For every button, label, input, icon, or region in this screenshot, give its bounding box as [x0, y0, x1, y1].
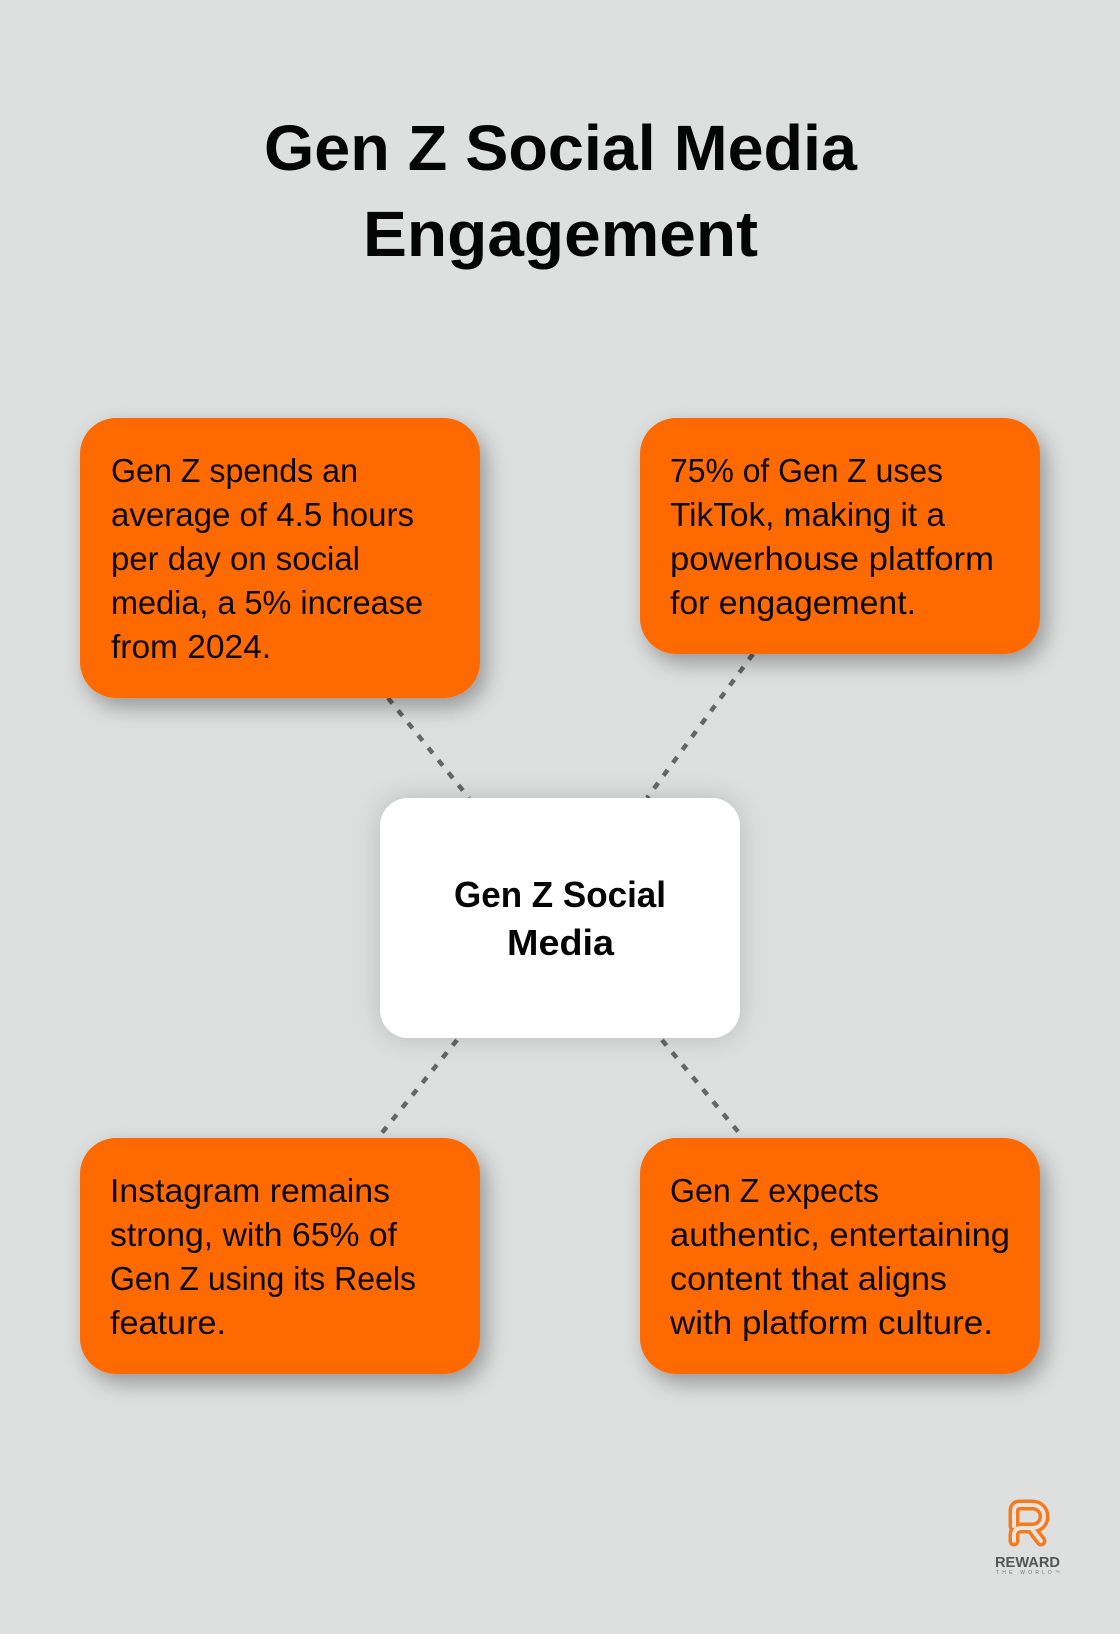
panel: TikTok: 75% of Gen Z uses — [670, 452, 943, 489]
title: Gen Z Social Media — [264, 112, 857, 184]
panel: expectations — [640, 1138, 1040, 1374]
panel: expectations: authentic, entertaining — [670, 1216, 1010, 1253]
panel: TikTok: for engagement. — [670, 584, 916, 621]
wordmark: REWARD — [995, 1554, 1060, 1571]
panel: center node: Gen Z Social — [454, 874, 666, 915]
panel: Instagram: Gen Z using its Reels — [110, 1260, 416, 1297]
panel: expectations: Gen Z expects — [670, 1172, 879, 1209]
panel: Instagram: feature. — [110, 1304, 226, 1341]
panel: TikTok — [640, 418, 1040, 654]
panel: expectations: content that aligns — [670, 1260, 947, 1297]
panel: TikTok: powerhouse platform — [670, 540, 994, 577]
panel: Instagram: Instagram remains — [110, 1172, 390, 1209]
logo — [995, 1505, 1060, 1576]
panel: center node — [380, 798, 740, 1038]
panel: center node: Media — [507, 922, 615, 963]
panel: time spent: per day on social — [111, 540, 360, 577]
panel: Instagram: strong, with 65% of — [110, 1216, 398, 1253]
panel: expectations: with platform culture. — [669, 1304, 993, 1341]
panel: Instagram — [80, 1138, 480, 1374]
title: Engagement — [363, 198, 758, 270]
connector: top right — [647, 654, 753, 798]
tagline: THE WORLD™ — [996, 1570, 1060, 1576]
panel: TikTok: TikTok, making it a — [670, 496, 946, 533]
connector: bottom left — [381, 1040, 457, 1134]
panel: time spent: Gen Z spends an — [111, 452, 358, 489]
connector: bottom right — [662, 1040, 740, 1134]
panel: time spent — [80, 418, 480, 698]
title — [264, 112, 857, 270]
panel: time spent: average of 4.5 hours — [111, 496, 414, 533]
connector: top left — [388, 698, 469, 798]
panel: time spent: media, a 5% increase — [111, 584, 423, 621]
panel: time spent: from 2024. — [111, 628, 271, 665]
icon: R mark — [1014, 1505, 1044, 1541]
